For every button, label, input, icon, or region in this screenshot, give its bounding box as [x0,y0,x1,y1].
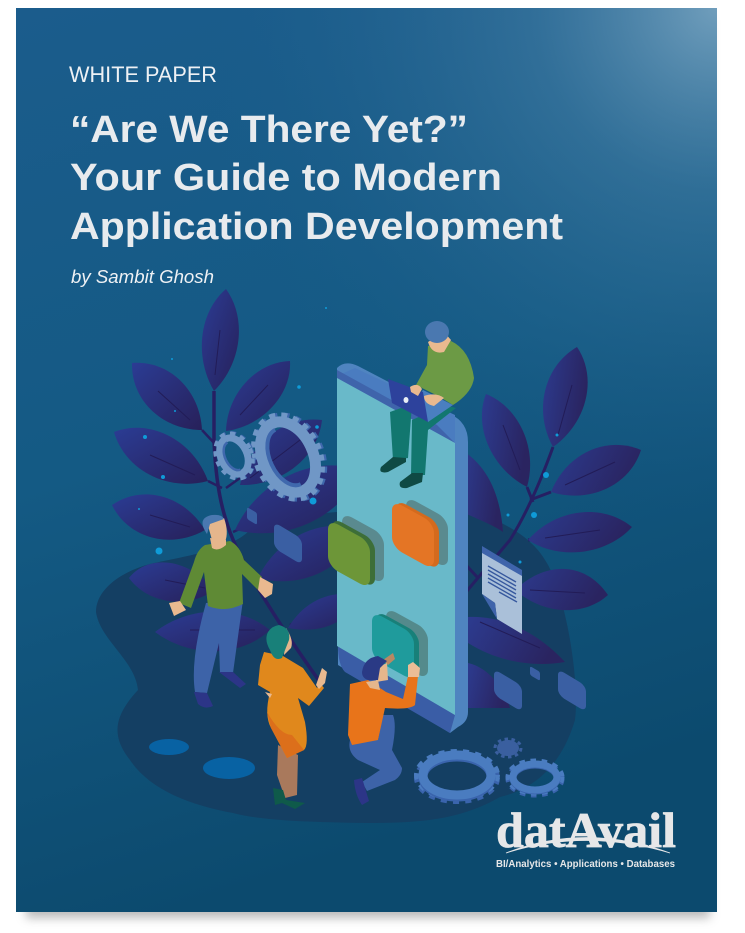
green app [328,512,384,589]
left plant leaves [112,289,360,651]
laptop [388,379,453,422]
man kneeling [348,653,420,805]
hands [408,662,420,677]
shoes [219,672,246,688]
document card [482,546,522,634]
hands [410,385,422,396]
title: Your Guide to Modern [70,157,502,199]
right plant stem [466,447,590,592]
shoes [380,457,406,472]
phone [337,363,468,733]
hair [362,656,387,680]
legs [194,600,243,693]
hair [266,625,289,659]
large upright gear [242,404,337,510]
title [70,109,563,248]
tiny floor gear [495,739,521,757]
arm hand [316,668,327,689]
phone screen [337,378,455,715]
floating tiles [247,507,586,712]
small floor gear [508,761,562,795]
woman in orange dress [258,625,327,809]
logo tagline: BI/Analytics • Applications • Databases [496,858,675,870]
torso and arms [179,541,262,609]
man sitting with laptop [380,321,474,488]
label: white paper: WHITE PAPER [69,62,217,87]
right plant [462,347,641,708]
face [284,628,292,655]
title: “Are We There Yet?” [70,109,468,151]
floor gears [417,739,562,801]
shoes [273,788,305,809]
right leaf veins [480,385,615,648]
floor ellipses [149,739,255,779]
small upright gear [209,428,260,484]
head [428,332,451,353]
dress [258,652,324,758]
teal app [372,607,428,682]
torso and arm [348,676,418,745]
man standing [169,515,273,708]
legs [277,745,298,798]
datAvail logo [496,802,676,870]
left plant [112,289,360,682]
hair [203,515,224,534]
face [366,663,388,690]
legs [349,715,402,791]
hand on hip [265,692,272,698]
logo swoosh [506,838,670,853]
phone side and rims [337,363,468,733]
ground blob [96,510,576,823]
left plant branches [202,430,340,625]
large floor gear [417,752,497,801]
logo wordmark: datAvail [496,802,676,858]
torso [416,341,474,405]
left plant stem [214,391,320,682]
left leaf veins [150,330,300,630]
author: by Sambit Ghosh [71,267,214,287]
floating dots [138,307,558,564]
title: Application Development [70,206,563,248]
hands [169,601,186,616]
neck and face [207,518,227,549]
shoe [354,778,369,805]
gears upright [209,404,337,510]
right plant leaves [462,347,641,708]
legs [390,404,412,460]
orange app [392,496,448,571]
app tiles [328,496,448,682]
